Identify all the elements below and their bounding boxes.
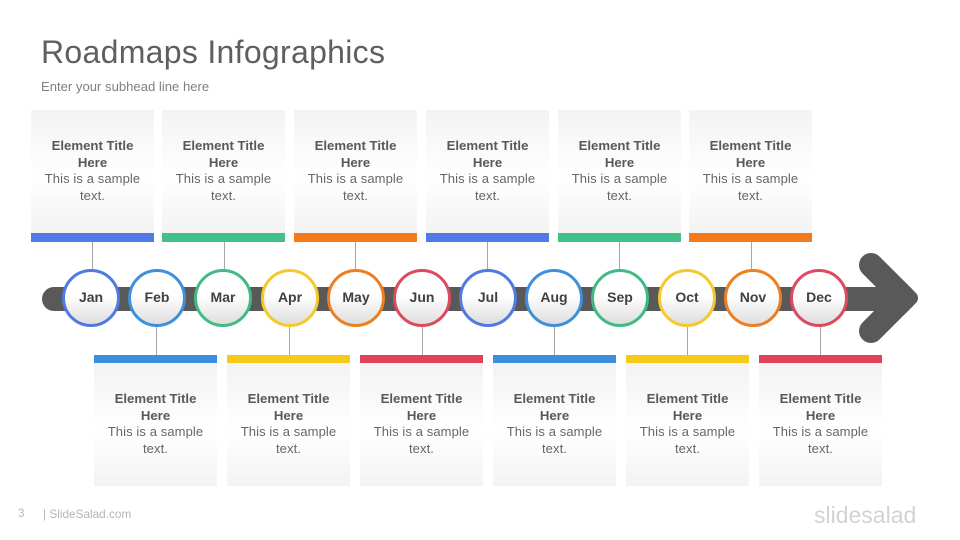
month: Dec: Dec	[806, 289, 832, 305]
month: Jan: Jan	[79, 289, 103, 305]
month: Oct: Oct	[675, 289, 699, 305]
top card 2: Element Title Here	[183, 138, 264, 170]
bottom card 2: Element Title Here	[248, 391, 329, 423]
bottom card 5	[626, 363, 749, 486]
month: Dec	[790, 269, 848, 327]
title: Roadmaps Infographics	[41, 34, 385, 70]
footer source: | SlideSalad.com	[43, 507, 131, 521]
subtitle: Enter your subhead line here	[41, 79, 209, 94]
bottom card 1 bar	[94, 355, 217, 364]
bottom card 6: This is a sample text.	[773, 424, 868, 456]
month: May	[327, 269, 385, 327]
month: Feb: Feb	[145, 289, 169, 305]
top card 5: This is a sample text.	[572, 171, 667, 202]
bottom card 4	[493, 363, 616, 486]
bottom card 4: This is a sample text.	[507, 424, 602, 456]
bottom card 3 bar	[360, 355, 483, 364]
top card 3: Element Title Here	[315, 138, 396, 170]
top card 1: Element Title Here	[52, 138, 133, 170]
top card 3 bar	[294, 233, 417, 242]
connector: Aug	[554, 327, 555, 355]
bottom card 1	[94, 363, 217, 486]
month: Sep	[591, 269, 649, 327]
month: Oct	[658, 269, 716, 327]
connector: Nov	[751, 242, 752, 270]
bottom card 6	[759, 363, 882, 486]
month: Apr: Apr	[278, 289, 302, 305]
bottom card 2: This is a sample text.	[241, 424, 336, 456]
month: Apr	[261, 269, 319, 327]
logo wordmark: slidesalad	[814, 502, 916, 528]
bottom card 4: Element Title Here	[514, 391, 595, 423]
month: Jul	[459, 269, 517, 327]
top card 1 bar	[31, 233, 154, 242]
top card 4 bar	[426, 233, 549, 242]
top card 3	[294, 110, 417, 233]
bottom card 1: Element Title Here	[115, 391, 196, 423]
month: Nov	[724, 269, 782, 327]
bottom card 5: This is a sample text.	[640, 424, 735, 456]
connector: Jan	[92, 242, 93, 270]
connector: Feb	[156, 327, 157, 355]
top card 1	[31, 110, 154, 233]
top card 2: This is a sample text.	[176, 171, 271, 202]
top card 5: Element Title Here	[579, 138, 660, 170]
connector: Sep	[619, 242, 620, 270]
month: Feb	[128, 269, 186, 327]
top card 6: This is a sample text.	[703, 171, 798, 202]
top card 6 bar	[689, 233, 812, 242]
bottom card 2	[227, 363, 350, 486]
connector: Apr	[289, 327, 290, 355]
month: May: May	[342, 289, 370, 305]
bottom card 1: This is a sample text.	[108, 424, 203, 456]
top card 2 bar	[162, 233, 285, 242]
top card 3: This is a sample text.	[308, 171, 403, 202]
connector: Jul	[487, 242, 488, 270]
bottom card 3: This is a sample text.	[374, 424, 469, 456]
connector: Oct	[687, 327, 688, 355]
bottom card 6: Element Title Here	[780, 391, 861, 423]
top card 2	[162, 110, 285, 233]
month: Jan	[62, 269, 120, 327]
month: Aug: Aug	[540, 289, 568, 305]
top card 6: Element Title Here	[710, 138, 791, 170]
top card 5 bar	[558, 233, 681, 242]
top card 5	[558, 110, 681, 233]
month: Sep: Sep	[607, 289, 633, 305]
month: Mar: Mar	[211, 289, 235, 305]
bottom card 3: Element Title Here	[381, 391, 462, 423]
bottom card 6 bar	[759, 355, 882, 364]
top card 4	[426, 110, 549, 233]
bottom card 5: Element Title Here	[647, 391, 728, 423]
bottom card 4 bar	[493, 355, 616, 364]
month: Mar	[194, 269, 252, 327]
page number: 3	[18, 508, 24, 520]
month: Nov: Nov	[740, 289, 766, 305]
connector: Mar	[224, 242, 225, 270]
top card 6	[689, 110, 812, 233]
month: Jun: Jun	[410, 289, 434, 305]
bottom card 3	[360, 363, 483, 486]
connector: May	[355, 242, 356, 270]
month: Jun	[393, 269, 451, 327]
bottom card 5 bar	[626, 355, 749, 364]
top card 1: This is a sample text.	[45, 171, 140, 202]
connector: Dec	[820, 327, 821, 355]
top card 4: This is a sample text.	[440, 171, 535, 202]
top card 4: Element Title Here	[447, 138, 528, 170]
bottom card 2 bar	[227, 355, 350, 364]
connector: Jun	[422, 327, 423, 355]
month: Jul: Jul	[478, 289, 498, 305]
month: Aug	[525, 269, 583, 327]
